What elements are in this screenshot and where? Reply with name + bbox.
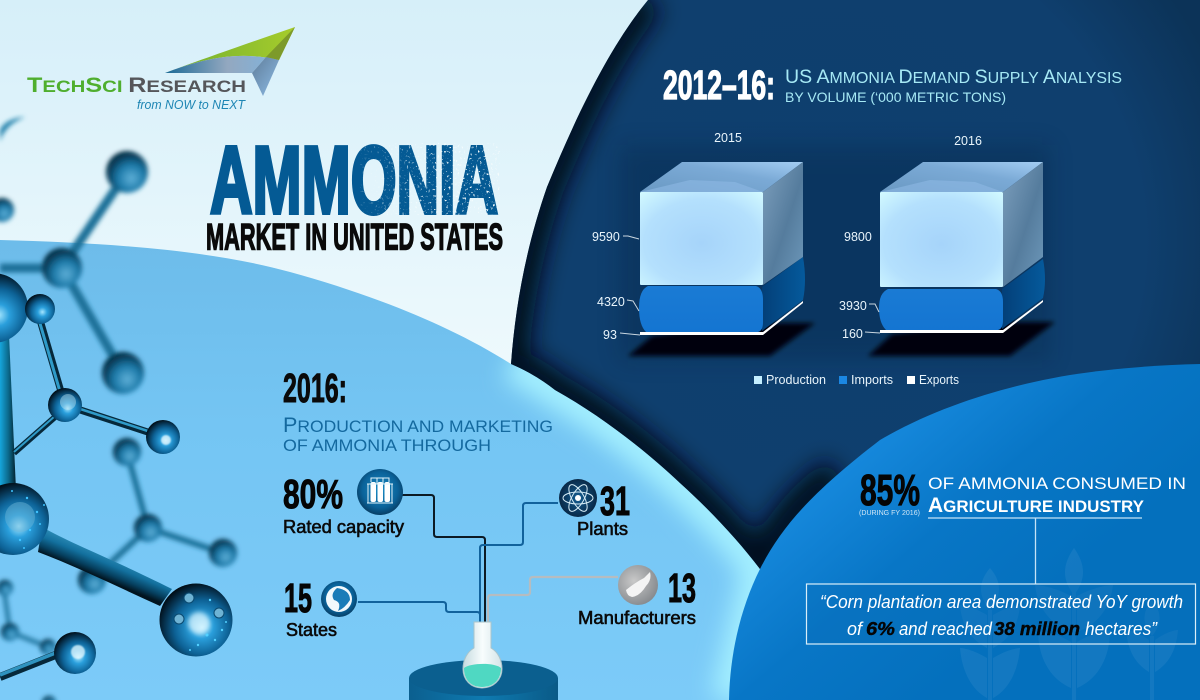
logo wordmark: TECH SCI RESEARCH [27,74,246,97]
value labels [839,230,880,341]
subheading line 1: PRODUCTION AND MARKETING [283,414,553,437]
subtitle: MARKET IN UNITED STATES [206,216,503,258]
exports segment [880,300,1043,333]
panel: demand supply navy [511,0,1200,569]
label: States [286,620,337,640]
callout: 85% agriculture [859,466,1186,584]
icon: test tubes [357,469,403,515]
sparkles [189,599,227,651]
heading line 1: US AMMONIA DEMAND SUPPLY ANALYSIS [785,67,1122,88]
shadow [868,322,1055,356]
imports segment [639,257,805,332]
quote line 2: and reached [899,619,993,639]
quote line 2: of [847,619,864,639]
value labels: 160 [842,327,863,341]
quote line 2: hectares” [1085,619,1158,639]
icon: flask [463,622,502,688]
chart: 2016 stacked 3D bar [839,134,1055,356]
decorative grunge speckle [360,143,500,215]
logo mark [165,27,295,96]
droplets [174,593,224,624]
pipes connecting stats to flask [358,495,618,622]
panel: production and marketing light blue [0,240,780,700]
callout: corn plantation quote [806,584,1196,644]
label: Manufacturers [578,608,696,628]
exports segment [640,301,803,335]
chart legend: Exports [919,373,959,387]
production segment [640,162,803,285]
underline and connector [928,518,1142,584]
production segment [880,162,1043,287]
imports segment [879,259,1045,330]
value labels: 9800 [844,230,872,244]
line 1: OF AMMONIA CONSUMED IN [928,474,1186,493]
chart legend: Production [766,373,826,387]
stat: 13 manufacturers [578,565,696,628]
quote line 2: 6% [866,619,895,639]
chart legend [754,373,959,387]
chart: 2015 stacked 3D bar [592,131,815,356]
quote line 2: 38 million [994,619,1080,639]
year: 2016: [283,365,347,411]
value labels: 93 [603,328,617,342]
molecule: sharp foreground structure [0,273,232,677]
value labels [592,230,640,342]
value: 15 [284,575,312,621]
value labels: 9590 [592,230,620,244]
heading line 2: BY VOLUME (‘000 METRIC TONS) [785,89,1006,105]
label: Rated capacity [283,517,404,537]
heading: 2012-16 demand supply [663,62,1122,108]
title word: Ammonia: AMMONIA [210,127,498,234]
year label 2016: 2016 [954,134,982,148]
value labels: 4320 [597,295,625,309]
value: 85% [860,466,920,515]
year label 2015: 2015 [714,131,742,145]
value labels: 3930 [839,299,867,313]
stat: 15 states [284,575,357,640]
stat: 31 plants [559,478,630,539]
sparkles [11,490,45,549]
quote line 2 [847,619,1158,639]
molecule: blurred background structure [0,117,237,700]
chart legend: Imports [851,373,893,387]
stat: 80% rated capacity [283,469,404,537]
dark halo behind charts [620,145,1050,360]
footnote: (DURING FY 2016) [859,510,920,517]
line 2: AGRICULTURE INDUSTRY [928,494,1145,517]
panel: agriculture mid blue [729,364,1200,700]
heading year range: 2012–16: [663,62,775,108]
value: 80% [283,471,343,517]
heading: 2016 production and marketing [283,365,553,455]
subheading line 2: OF AMMONIA THROUGH [283,436,491,455]
pedestal [409,660,558,700]
title [207,143,503,250]
icon: globe [321,581,357,617]
logo tagline: from NOW to NEXT [137,98,246,112]
quote line 1: “Corn plantation area demonstrated YoY growth [820,592,1183,612]
quote box [806,584,1196,644]
value: 31 [600,478,630,524]
icon: wheat watermark [960,548,1178,700]
value: 13 [668,565,696,611]
label: Plants [577,519,628,539]
icon: dna [618,565,658,605]
logo: TechSci Research [27,27,295,112]
icon: atom [559,479,597,517]
shadow [628,323,815,356]
